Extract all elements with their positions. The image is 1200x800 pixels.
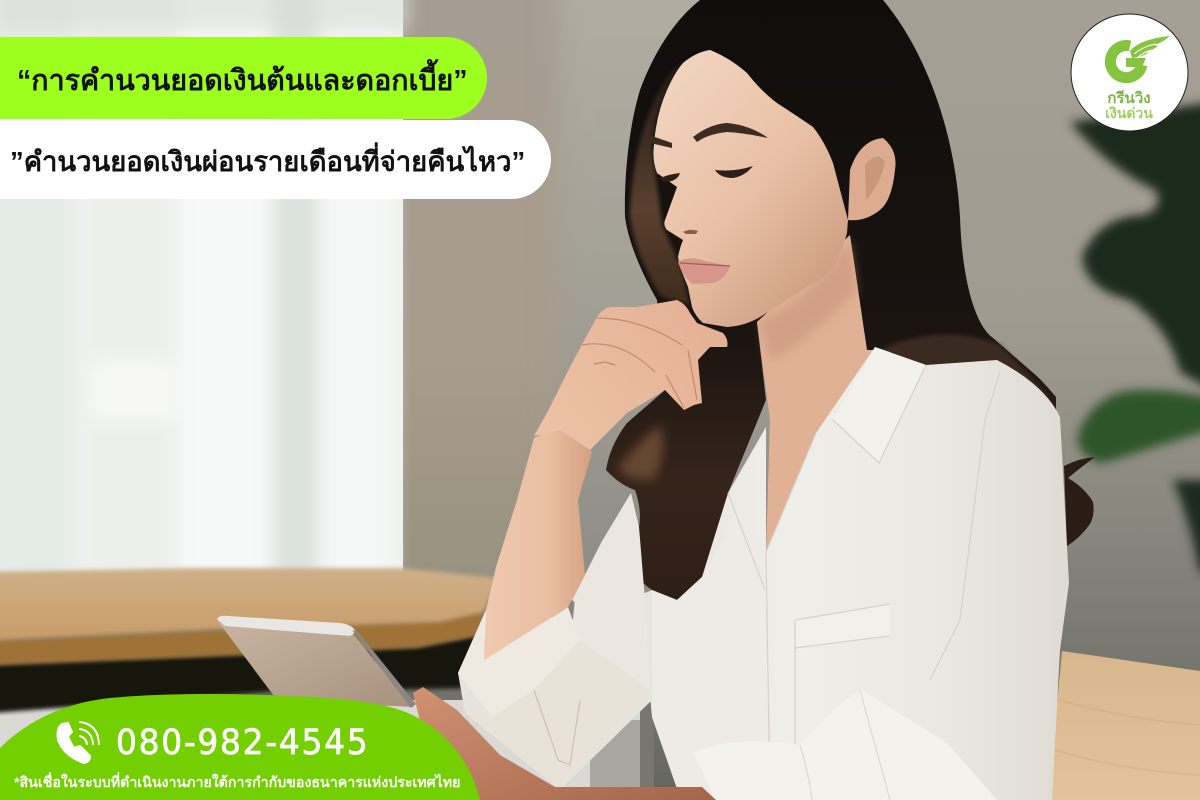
shirt [458, 347, 1069, 800]
tablet [217, 616, 416, 708]
hand under chin [534, 300, 728, 450]
logo wordmark: กรีนวิง [1107, 89, 1151, 107]
contact panel [0, 694, 480, 800]
chair [1048, 651, 1200, 800]
table [0, 568, 654, 800]
icon: phone with signal [58, 722, 99, 763]
lower hand holding tablet [413, 687, 716, 800]
window with sheer curtains [0, 0, 410, 600]
hair [606, 0, 1056, 600]
eyebrows [649, 123, 768, 148]
icon: winged G mark [1110, 36, 1170, 78]
title pill: “การคำนวนยอดเงินต้นและดอกเบี้ย” [17, 65, 468, 97]
phone number: 080-982-4545 [116, 723, 369, 763]
forearm [484, 425, 592, 660]
lips [678, 258, 730, 284]
hair ends behind right shoulder [1064, 457, 1095, 546]
face [649, 50, 896, 327]
subtitle pill [0, 120, 551, 199]
eyes [660, 166, 753, 182]
plant [1070, 100, 1200, 580]
logo badge: เงินด่วน [1105, 105, 1153, 121]
neck [757, 235, 880, 552]
subtitle pill: ”คำนวนยอดเงินผ่อนรายเดือนที่จ่ายคืนไหว” [10, 146, 525, 177]
title pill [0, 37, 487, 119]
ear [848, 138, 896, 220]
logo badge [1070, 14, 1188, 132]
nose shadow [683, 230, 698, 234]
disclaimer: *สินเชื่อในระบบที่ดำเนินงานภายใต้การกำกับของธนาคารแห่งประเทศไทย [14, 775, 460, 791]
